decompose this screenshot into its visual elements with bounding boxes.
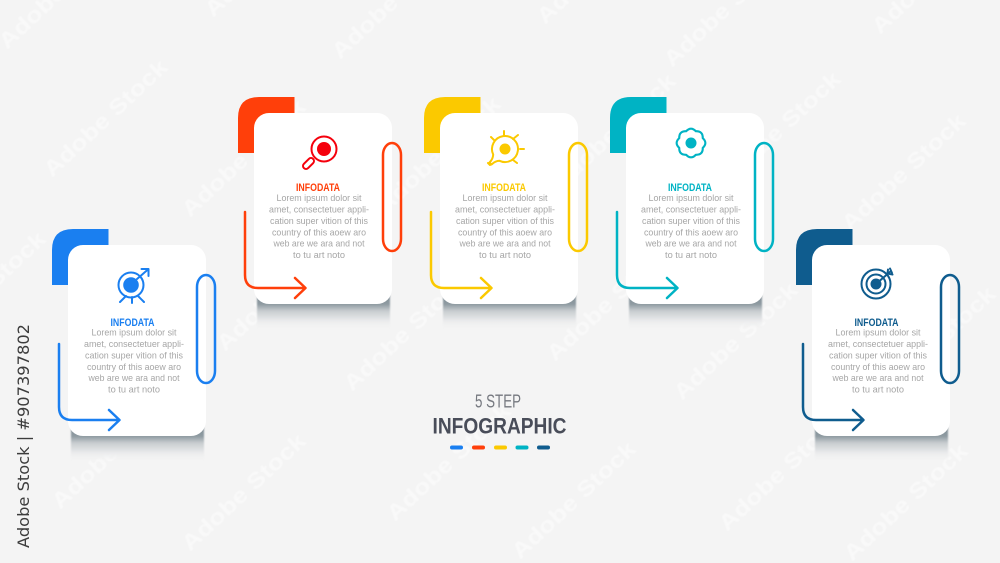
body text: cation super vition of this	[270, 216, 368, 227]
watermark pattern: Adobe Stock	[711, 66, 846, 194]
body text: web are we ara and not	[832, 373, 924, 384]
body text: to tu art noto	[479, 250, 531, 261]
panel: step 5 navy	[796, 229, 959, 462]
body text: amet, consectetuer appli-	[828, 339, 928, 350]
heading: INFODATA	[854, 317, 899, 329]
card	[626, 113, 764, 304]
subtitle: 5 step: 5 STEP	[475, 392, 521, 412]
card shadow	[71, 424, 204, 462]
watermark pattern: Adobe Stock	[371, 91, 506, 219]
icon: bullseye with arrow	[862, 268, 892, 298]
icon: target with arrow	[118, 269, 148, 303]
body text	[455, 193, 555, 261]
panel: step 1 blue	[52, 229, 215, 462]
arrow	[59, 344, 120, 430]
body text: cation super vition of this	[85, 350, 183, 362]
watermark pattern: Adobe Stock	[668, 277, 803, 405]
card	[254, 113, 392, 304]
body text: amet, consectetuer appli-	[84, 339, 184, 350]
corner tab	[424, 97, 480, 153]
icon: light bulb	[488, 131, 524, 165]
body text: to tu art noto	[108, 384, 160, 396]
card shadow	[629, 292, 762, 330]
body text	[269, 193, 369, 261]
watermark pattern: Adobe Stock	[176, 428, 311, 556]
body text: cation super vition of this	[642, 216, 740, 227]
panel: step 3 yellow	[424, 97, 587, 330]
body text: country of this aoew aro	[87, 362, 181, 373]
body text: Lorem ipsum dolor sit	[276, 193, 362, 204]
arrow	[803, 344, 864, 430]
body text: web are we ara and not	[273, 238, 365, 249]
panel: step 2 red	[238, 97, 401, 330]
corner tab	[52, 229, 108, 285]
card	[440, 113, 578, 304]
body text: amet, consectetuer appli-	[269, 204, 369, 215]
watermark pattern: Adobe Stock	[176, 94, 311, 222]
title	[432, 392, 566, 438]
card shadow	[815, 424, 948, 462]
watermark pattern: Adobe Stock	[546, 68, 681, 196]
body text: cation super vition of this	[456, 216, 554, 227]
watermark pattern: Adobe Stock	[866, 281, 1000, 409]
arrow	[617, 212, 678, 298]
body text	[828, 328, 928, 396]
watermark pattern: Adobe Stock	[211, 228, 346, 356]
heading: INFODATA	[110, 317, 155, 329]
corner tab	[238, 97, 294, 153]
card shadow	[257, 292, 390, 330]
body text: web are we ara and not	[88, 373, 180, 384]
watermark pattern: Adobe Stock	[836, 108, 971, 236]
corner tab	[796, 229, 852, 285]
card shadow	[443, 292, 576, 330]
watermark pattern: Adobe Stock	[838, 438, 973, 563]
body text: Lorem ipsum dolor sit	[648, 193, 734, 204]
watermark pattern: Adobe Stock	[381, 398, 516, 526]
arrow	[245, 212, 306, 298]
body text: web are we ara and not	[459, 238, 551, 249]
pill outline	[383, 143, 401, 251]
heading: INFODATA	[296, 182, 340, 194]
body text: to tu art noto	[665, 250, 717, 261]
watermark pattern: Adobe Stock	[38, 54, 173, 182]
icon: gear badge	[677, 129, 705, 157]
heading: INFODATA	[668, 182, 712, 194]
heading: INFODATA	[482, 182, 526, 194]
pill outline	[197, 275, 215, 383]
side credit text: Adobe Stock | #907397802	[14, 324, 33, 548]
body text: to tu art noto	[852, 384, 904, 396]
corner tab	[610, 97, 666, 153]
icon: magnifier	[302, 136, 336, 170]
body text: Lorem ipsum dolor sit	[92, 328, 177, 338]
watermark pattern: Adobe Stock	[46, 386, 181, 514]
body text	[641, 193, 741, 261]
body text: Lorem ipsum dolor sit	[462, 193, 548, 204]
card	[68, 245, 206, 436]
card	[812, 245, 950, 436]
body text	[84, 328, 184, 396]
colour key dashes	[450, 446, 550, 450]
heading: infographic: INFOGRAPHIC	[432, 414, 566, 438]
arrow	[431, 212, 492, 298]
body text: to tu art noto	[293, 250, 345, 261]
pill outline	[941, 275, 959, 383]
body text: country of this aoew aro	[644, 227, 738, 238]
body text: amet, consectetuer appli-	[455, 204, 555, 215]
body text: country of this aoew aro	[458, 227, 552, 238]
body text: country of this aoew aro	[831, 362, 925, 373]
watermark pattern: Adobe Stock	[713, 408, 848, 536]
watermark pattern: Adobe Stock	[338, 268, 473, 396]
body text: web are we ara and not	[645, 238, 737, 249]
pill outline	[569, 143, 587, 251]
body text: Lorem ipsum dolor sit	[836, 328, 921, 338]
panel: step 4 teal	[610, 97, 773, 330]
watermark pattern: Adobe Stock	[506, 436, 641, 563]
body text: cation super vition of this	[829, 350, 927, 362]
body text: amet, consectetuer appli-	[641, 204, 741, 215]
pill outline	[755, 143, 773, 251]
watermark pattern: Adobe Stock	[541, 238, 676, 366]
body text: country of this aoew aro	[272, 227, 366, 238]
